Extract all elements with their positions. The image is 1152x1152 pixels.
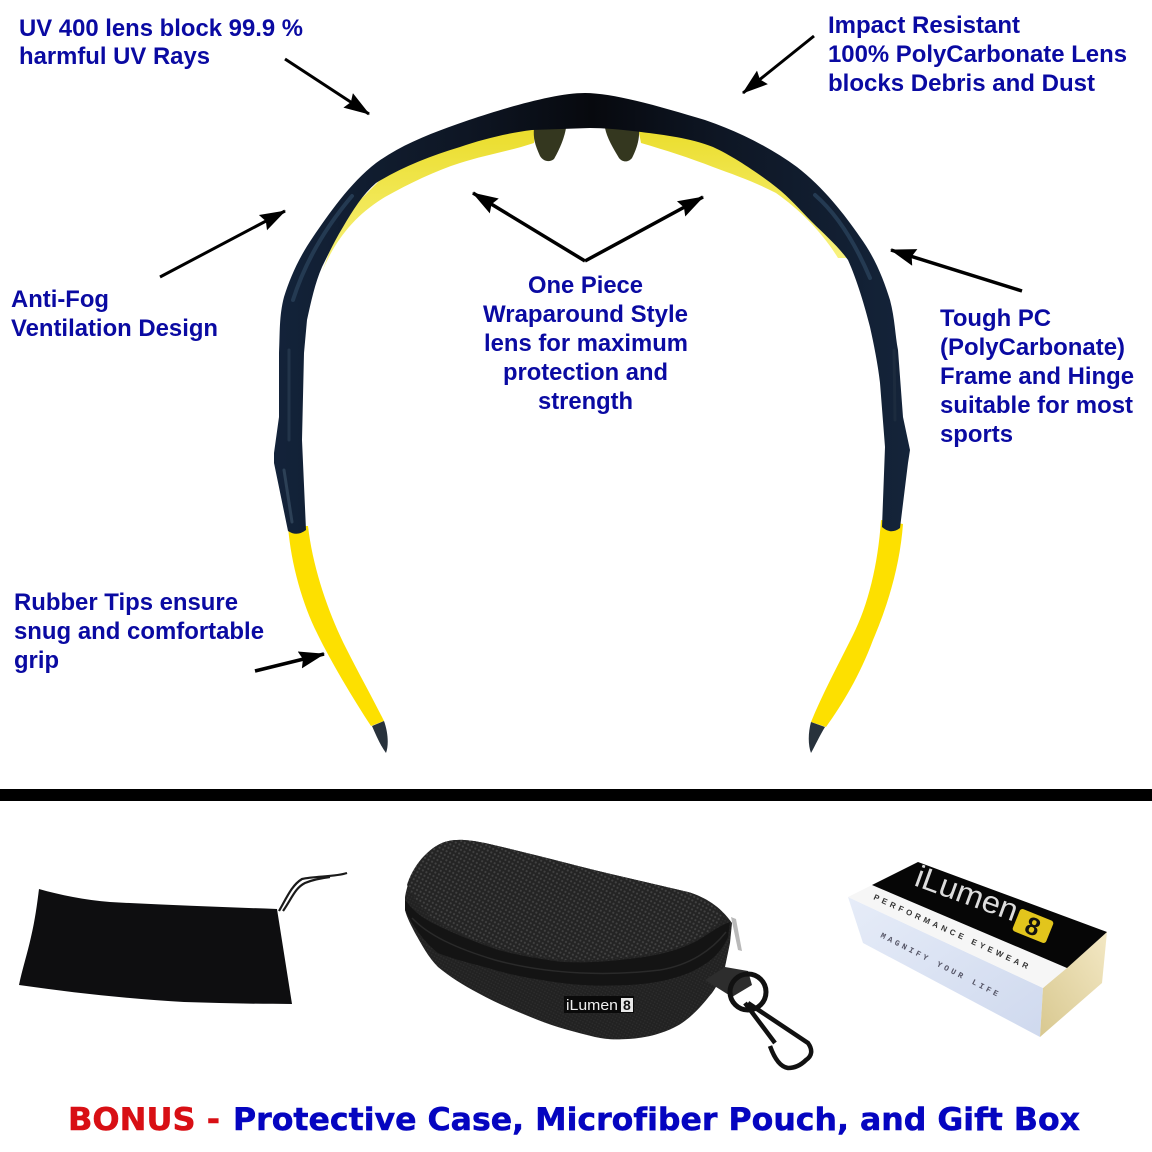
callout: anti-fog: Ventilation Design — [11, 315, 218, 342]
box black top — [872, 862, 1107, 968]
box logo mark — [1011, 907, 1055, 947]
callout: rubber tips: Rubber Tips ensure — [14, 589, 238, 616]
box front face — [848, 897, 1043, 1037]
box end face — [1040, 932, 1107, 1037]
callout: wraparound lens: strength — [538, 388, 633, 415]
arrows: wraparound lens — [473, 193, 703, 261]
callout: wraparound lens: One Piece — [528, 272, 643, 299]
callout: UV protection: harmful UV Rays — [19, 43, 210, 70]
callout: tough frame — [940, 305, 1134, 448]
strap and clip — [705, 967, 811, 1068]
case logo: 8 — [623, 997, 631, 1013]
temple end: right — [809, 722, 825, 753]
callout: UV protection: UV 400 lens block 99.9 % — [19, 15, 303, 42]
arrow: tough frame — [891, 250, 1022, 291]
callout: tough frame: suitable for most — [940, 392, 1133, 419]
zipper pull — [731, 917, 742, 951]
arrow: UV protection — [285, 59, 369, 114]
callout: wraparound lens: lens for maximum — [484, 330, 688, 357]
lens: yellow wraparound right — [637, 122, 852, 258]
callout: tough frame: sports — [940, 421, 1013, 448]
frame: dark navy band — [274, 93, 910, 534]
arrow: rubber tips — [255, 654, 324, 671]
case bottom shell — [405, 840, 732, 1039]
icon: microfiber pouch — [19, 873, 347, 1004]
callout: impact resistant: blocks Debris and Dust — [828, 70, 1095, 97]
temple tip: right yellow — [811, 520, 903, 727]
callout: impact resistant: Impact Resistant — [828, 12, 1020, 39]
box slogan: MAGNIFY YOUR LIFE — [879, 932, 1000, 999]
glasses: top-down view — [274, 93, 910, 753]
bonus caption: Protective Case, Microfiber Pouch, and Gift Box — [233, 1102, 1080, 1138]
box tagline: PERFORMANCE EYEWEAR — [872, 893, 1030, 971]
case logo: iLumen — [566, 997, 618, 1014]
callout: impact resistant — [828, 12, 1127, 97]
arrow: impact resistant — [743, 36, 814, 93]
callout: wraparound lens: protection and — [503, 359, 668, 386]
nose pad: right — [605, 128, 639, 161]
callout: UV protection — [19, 15, 303, 70]
callout: impact resistant: 100% PolyCarbonate Lens — [828, 41, 1127, 68]
nose pad: left — [534, 128, 566, 161]
callout: wraparound lens: Wraparound Style — [483, 301, 688, 328]
icon: gift box — [848, 859, 1107, 1037]
box brand: iLumen — [911, 859, 1023, 928]
divider bar — [0, 789, 1152, 801]
bonus caption: BONUS - — [68, 1102, 220, 1138]
arrow: anti-fog — [160, 211, 285, 277]
frame highlights — [284, 195, 895, 522]
temple end: left — [372, 721, 388, 753]
callout: rubber tips: grip — [14, 647, 59, 674]
lens: yellow wraparound left — [322, 122, 536, 272]
case lid mesh — [407, 840, 722, 960]
callout: anti-fog — [11, 286, 218, 342]
callout: rubber tips — [14, 589, 264, 674]
callout: anti-fog: Anti-Fog — [11, 286, 109, 313]
case zipper band — [405, 900, 730, 986]
callout: tough frame: Tough PC — [940, 305, 1051, 332]
icon: protective case — [405, 840, 811, 1068]
callout: wraparound lens — [483, 272, 688, 415]
case logo — [564, 996, 634, 1014]
box white stripe — [848, 885, 1067, 988]
callout: rubber tips: snug and comfortable — [14, 618, 264, 645]
callout: tough frame: (PolyCarbonate) — [940, 334, 1125, 361]
temple tip: left yellow — [288, 526, 384, 726]
box logo mark: 8 — [1021, 911, 1044, 943]
callout: tough frame: Frame and Hinge — [940, 363, 1134, 390]
